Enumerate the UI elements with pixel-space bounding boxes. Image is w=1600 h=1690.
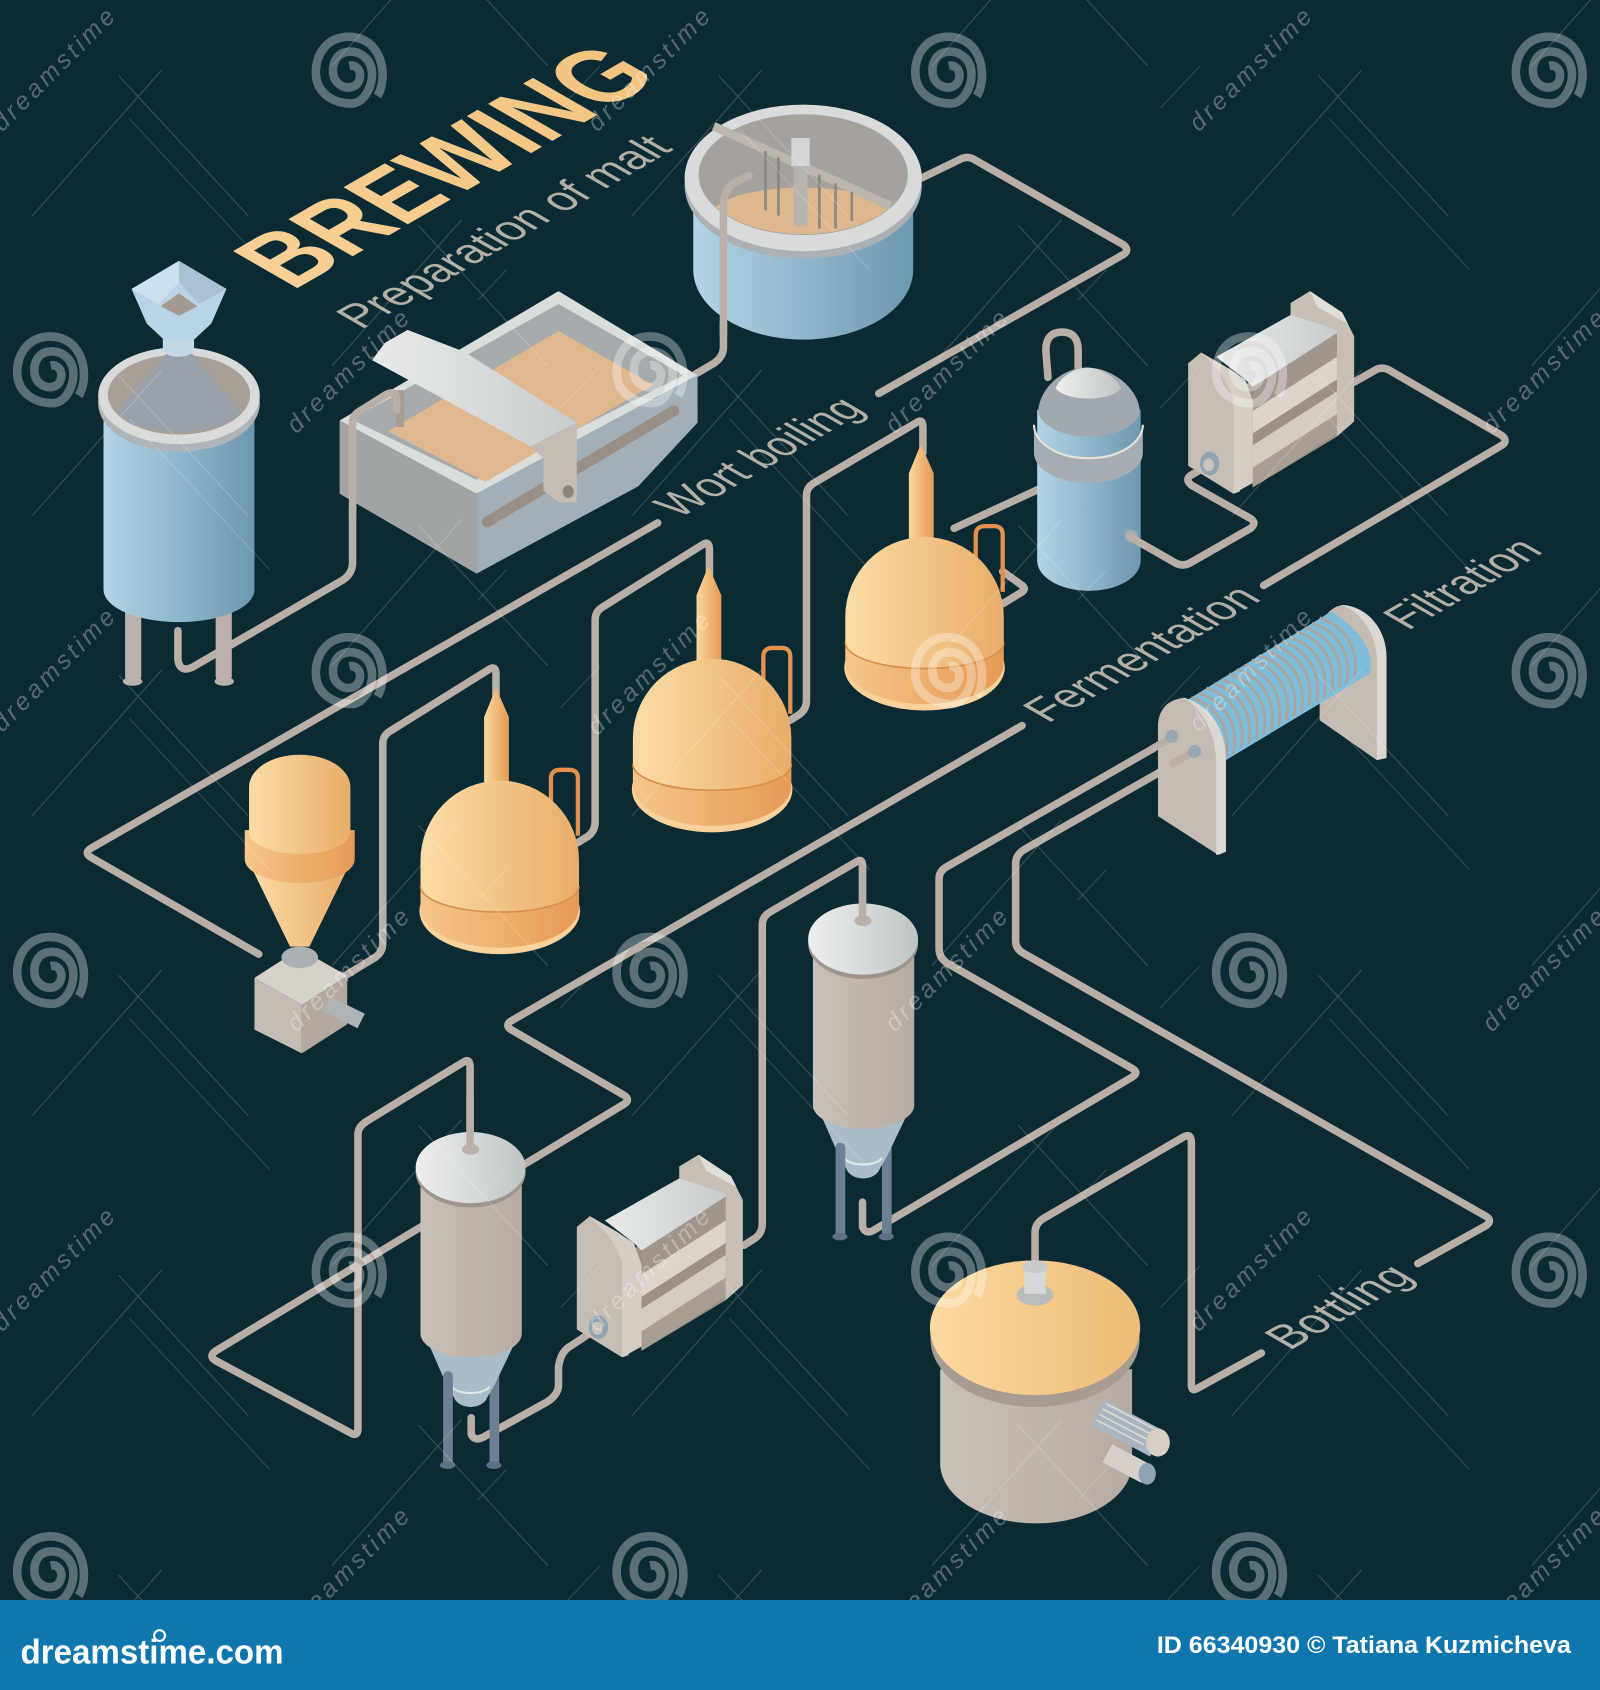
flange xyxy=(1017,1284,1053,1306)
watermark text: dreamstime xyxy=(880,904,1013,1037)
small nozzle xyxy=(1107,1453,1146,1474)
front stand xyxy=(1158,698,1226,855)
silo cone xyxy=(116,354,242,432)
watermark text: dreamstime xyxy=(582,3,716,137)
grain mill xyxy=(245,755,361,1053)
large nozzle xyxy=(1098,1412,1157,1444)
agitator xyxy=(714,126,891,206)
footer bar xyxy=(0,1600,1600,1690)
watermark text: dreamstime xyxy=(282,1503,415,1637)
bottling tank xyxy=(930,1260,1170,1523)
heat exchanger upper xyxy=(1188,291,1354,494)
watermark text: dreamstime xyxy=(582,607,716,741)
watermark text: dreamstime xyxy=(1184,604,1317,737)
coil rings xyxy=(1191,618,1355,758)
rear stand xyxy=(1320,605,1387,760)
watermark text: dreamstime xyxy=(880,305,1013,439)
tun slot xyxy=(487,411,674,522)
label: Bottling: Bottling xyxy=(1253,1257,1425,1356)
tun top rim xyxy=(340,291,698,494)
rake beam xyxy=(372,330,577,446)
coil pipes and nozzles xyxy=(1151,737,1195,763)
mash surface xyxy=(716,188,891,234)
malt surface xyxy=(388,331,653,482)
pipe stubs on tank lids xyxy=(470,866,863,1147)
label: Preparation of malt: Preparation of malt xyxy=(325,128,684,335)
kettle 2 xyxy=(632,566,792,832)
silo body xyxy=(104,420,254,622)
kettle 1 xyxy=(419,688,580,954)
pipes in front of tun and mash vessel xyxy=(353,176,749,518)
tall tank lower left xyxy=(416,1132,526,1469)
fermenter tank xyxy=(1034,368,1143,591)
watermark text: dreamstime xyxy=(1184,1203,1317,1337)
footer logo spiral xyxy=(154,1630,165,1641)
lauter tun xyxy=(340,291,698,574)
tun right face xyxy=(477,375,698,574)
kettle 3 xyxy=(844,444,1005,711)
tun left face xyxy=(340,420,477,574)
watermark text: dreamstime xyxy=(282,904,415,1037)
heat exchanger lower xyxy=(577,1155,743,1357)
silo legs xyxy=(123,604,234,686)
pipe: fermenter to heat exchanger xyxy=(1130,465,1254,565)
label: Filtration: Filtration xyxy=(1372,531,1554,636)
pipes behind the equipment xyxy=(87,157,1505,1439)
mash tun xyxy=(685,105,922,340)
label: Fermentation: Fermentation xyxy=(1012,578,1272,729)
watermark text: dreamstime xyxy=(282,305,415,439)
coil body xyxy=(1186,611,1371,760)
hopper xyxy=(132,261,226,340)
footer logo: dreamstime.com xyxy=(20,1634,284,1672)
silo with hopper xyxy=(98,261,260,686)
label: Wort boiling: Wort boiling xyxy=(643,390,876,524)
watermark text: dreamstime xyxy=(1184,3,1317,137)
footer credit: ID 66340930 © Tatiana Kuzmicheva xyxy=(1157,1633,1572,1659)
watermark text: dreamstime xyxy=(880,1503,1013,1637)
filtration coil xyxy=(1151,605,1387,855)
watermark text: dreamstime xyxy=(582,1203,716,1337)
tall tank centre xyxy=(808,903,918,1240)
